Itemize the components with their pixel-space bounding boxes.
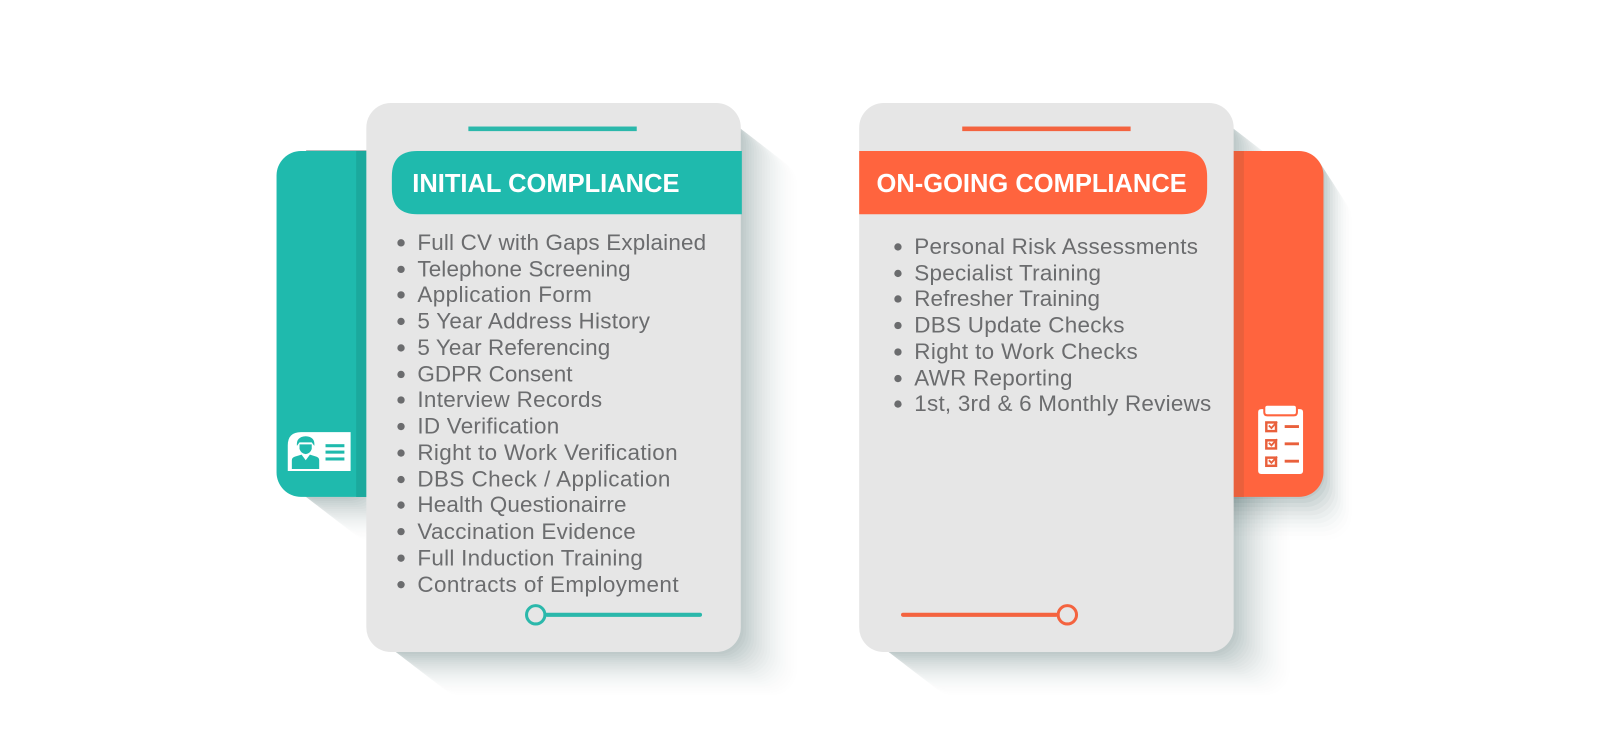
icon: checklist clipboard bbox=[1258, 406, 1303, 474]
panel: on-going compliance bbox=[859, 103, 1351, 695]
list: on-going compliance: Refresher Training bbox=[914, 286, 1100, 311]
list: initial compliance: Interview Records bbox=[417, 387, 602, 412]
list: initial compliance: Application Form bbox=[417, 282, 592, 307]
top accent line bbox=[468, 127, 637, 131]
list: initial compliance: Full CV with Gaps Explained bbox=[417, 230, 706, 255]
card bbox=[859, 103, 1234, 652]
list: initial compliance: 5 Year Address History bbox=[417, 309, 651, 334]
list: initial compliance: GDPR Consent bbox=[417, 362, 573, 387]
slider accent bbox=[901, 606, 1077, 624]
card shadow bbox=[382, 118, 797, 695]
back tab bbox=[277, 151, 399, 497]
list: initial compliance: DBS Check / Application bbox=[417, 467, 670, 492]
back tab shadow bbox=[1204, 153, 1351, 540]
icon: ID card bbox=[288, 432, 351, 471]
list: initial compliance: Contracts of Employment bbox=[417, 572, 679, 597]
panel: initial compliance bbox=[277, 103, 797, 695]
list: on-going compliance: Specialist Training bbox=[914, 261, 1101, 286]
list: initial compliance: Health Questionairre bbox=[417, 492, 627, 517]
back tab bbox=[1204, 151, 1323, 497]
heading: initial compliance: INITIAL COMPLIANCE bbox=[412, 170, 680, 198]
list: on-going compliance: Personal Risk Assessments bbox=[914, 234, 1198, 259]
top accent line bbox=[962, 127, 1131, 131]
list: on-going compliance bbox=[894, 234, 1211, 416]
list: on-going compliance: 1st, 3rd & 6 Monthly Reviews bbox=[914, 391, 1211, 416]
card bbox=[366, 103, 741, 652]
list: initial compliance: ID Verification bbox=[417, 414, 559, 439]
slider accent bbox=[527, 606, 702, 624]
card shadow bbox=[875, 118, 1289, 695]
list: initial compliance: 5 Year Referencing bbox=[417, 335, 610, 360]
list: initial compliance: Telephone Screening bbox=[417, 257, 631, 282]
heading: initial compliance bbox=[392, 151, 742, 214]
list: on-going compliance: DBS Update Checks bbox=[914, 313, 1124, 338]
list: on-going compliance: Right to Work Checks bbox=[914, 339, 1138, 364]
list: initial compliance: Full Induction Training bbox=[417, 545, 643, 570]
back tab shadow bbox=[292, 150, 423, 540]
heading: on-going compliance: ON-GOING COMPLIANCE bbox=[877, 170, 1187, 198]
heading: on-going compliance bbox=[859, 151, 1207, 214]
list: initial compliance: Right to Work Verification bbox=[417, 440, 678, 465]
list: initial compliance bbox=[397, 230, 706, 597]
list: initial compliance: Vaccination Evidence bbox=[417, 519, 636, 544]
list: on-going compliance: AWR Reporting bbox=[914, 366, 1072, 391]
